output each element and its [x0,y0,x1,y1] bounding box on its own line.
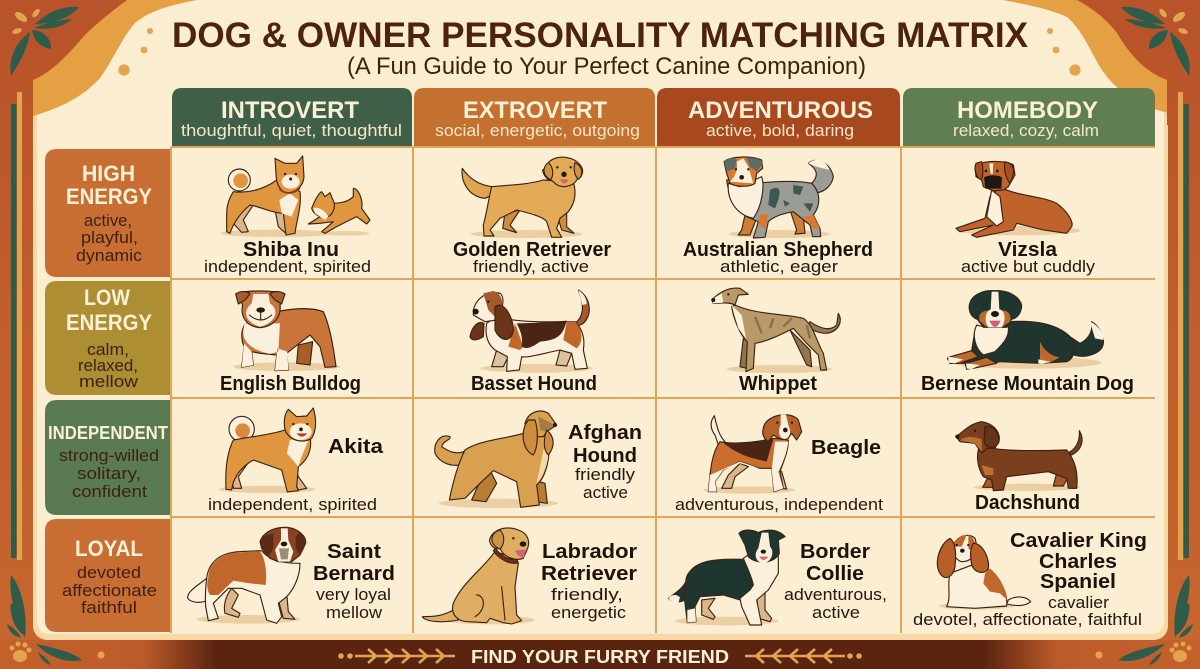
cell: Vizsla: active but cuddly [961,258,1096,276]
leaf ornament top-left [10,7,79,76]
paw bottom-right [1170,642,1192,662]
cell: English Bulldog [220,291,361,395]
footer text: FIND YOUR FURRY FRIEND [471,647,729,667]
left side bars [11,92,22,560]
footer banner [0,640,1200,669]
cell: Akita [208,408,384,514]
paw bottom-left [10,642,32,662]
decorative dots left [118,28,153,76]
cell: Vizsla [956,161,1096,276]
cell: Border Collie [668,530,887,625]
column header: adventurous: ADVENTUROUS [688,97,873,124]
icon: labrador retriever [422,528,535,624]
row label: independent: INDEPENDENT [48,423,168,443]
column header: introvert: thoughtful, quiet, thoughtful [181,121,402,140]
row label: independent: confident [72,482,147,501]
row label: low energy: mellow [79,372,139,391]
icon: basset hound [470,290,593,373]
column header: homebody: HOMEBODY [957,97,1098,124]
cell: Whippet: Whippet [739,373,817,395]
row label: high energy: playful, [81,228,138,247]
cell: Labrador Retriever: Labrador [542,541,637,563]
leaves bottom-left [7,575,82,665]
icon: bernese mountain dog [947,291,1104,369]
cell: Bernese Mountain Dog [921,291,1134,395]
row label: high energy: ENERGY [66,184,152,209]
row label: high energy: dynamic [76,246,143,265]
cell: Shiba Inu: independent, spirited [204,258,371,276]
row label: low energy: relaxed, [78,356,138,375]
title: DOG & OWNER PERSONALITY MATCHING MATRIX [172,16,1029,55]
icon: akita [218,408,316,493]
leaves bottom-right [1118,575,1193,665]
cell: Labrador Retriever: Retriever [541,563,637,585]
cell: Border Collie: adventurous, [784,586,887,604]
cell: Beagle: Beagle [811,437,881,459]
row label: loyal: devoted [77,563,141,582]
column header: homebody [903,88,1155,146]
row label: independent: strong-willed [59,446,159,465]
cell: Afghan Hound: Afghan [568,422,642,444]
left arrows [340,649,455,663]
decorative dots right [1047,28,1081,76]
icon: english bulldog [233,291,340,371]
cell: Akita: independent, spirited [208,496,377,514]
cell: Afghan Hound: friendly [575,466,636,484]
dot bottom-right [1095,651,1103,659]
row label: low energy: ENERGY [66,310,152,335]
right arrows [745,649,860,663]
cell: Cavalier King Charles Spaniel: devotel, affectionate, faithful [913,611,1142,629]
cell: Afghan Hound: Hound [573,445,637,467]
cell: Akita: Akita [328,436,384,458]
icon: golden retriever [462,157,583,238]
column header: extrovert: EXTROVERT [463,97,607,124]
cell: Australian Shepherd: athletic, eager [720,258,839,276]
cell: Dachshund [955,422,1082,514]
cell: English Bulldog: English Bulldog [220,373,361,395]
matrix cell background [171,147,1155,633]
cell: Golden Retriever [453,157,611,276]
cell: Cavalier King Charles Spaniel: Cavalier King [1010,530,1147,552]
cell: Labrador Retriever [422,528,637,624]
row label: independent: solitary, [77,464,141,483]
cell: Labrador Retriever: friendly, [551,586,623,604]
row label: loyal: faithful [81,598,137,617]
cell: Golden Retriever: friendly, active [473,258,589,276]
icon: whippet [711,288,840,373]
cell: Basset Hound [470,290,597,395]
right side bars [1178,92,1189,560]
icon: dachshund [955,422,1082,491]
column header: introvert: INTROVERT [221,97,359,124]
cell: Beagle [675,414,883,514]
cell: Cavalier King Charles Spaniel: Spaniel [1040,571,1116,593]
cell: Vizsla: Vizsla [998,239,1058,261]
dot bottom-left [97,651,105,659]
cell: Cavalier King Charles Spaniel: cavalier [1048,594,1110,612]
cell: Saint Bernard: very loyal [316,586,391,604]
cell: Cavalier King Charles Spaniel [913,530,1147,629]
icon: border collie [668,530,785,625]
subtitle: (A Fun Guide to Your Perfect Canine Companion) [347,53,866,80]
cell: Whippet [711,288,840,395]
cell: Labrador Retriever: energetic [551,604,626,622]
column header: adventurous [657,88,900,146]
row label: high energy [45,149,171,277]
cell: Border Collie: Collie [806,563,864,585]
column header: homebody: relaxed, cozy, calm [953,121,1099,140]
icon: saint bernard [188,527,306,624]
row label: high energy: active, [84,211,132,230]
cell: Shiba Inu [204,156,371,276]
cell: Saint Bernard [188,527,395,624]
cell: Golden Retriever: Golden Retriever [453,239,611,261]
row label: low energy: LOW [84,285,130,310]
cell: Basset Hound: Basset Hound [471,373,597,395]
row label: high energy: HIGH [82,161,135,186]
top-right corner wave [1003,0,1200,125]
cell: Bernese Mountain Dog: Bernese Mountain Dog [921,373,1134,395]
icon: vizsla [956,161,1080,237]
row label: low energy: calm, [87,340,129,359]
cell: Shiba Inu: Shiba Inu [243,239,339,261]
column header: extrovert [414,88,655,146]
cell: Cavalier King Charles Spaniel: Charles [1039,551,1117,573]
icon: beagle [703,414,802,494]
cell: Border Collie: active [812,604,860,622]
icon: shiba dogs [220,156,370,237]
row label: independent [45,400,171,515]
cell: Afghan Hound: active [583,484,628,502]
cell: Australian Shepherd [683,157,873,276]
row label: low energy [45,281,171,395]
column header: introvert [172,88,412,146]
cell: Australian Shepherd: Australian Shepherd [683,239,873,261]
cell: Saint Bernard: Saint [327,541,381,563]
icon: australian shepherd [724,157,833,238]
row label: loyal: LOYAL [75,536,143,561]
cell: Saint Bernard: mellow [326,604,382,622]
cell: Border Collie: Border [800,541,870,563]
row label: loyal [45,519,171,632]
icon: afghan hound [435,411,558,508]
cell: Afghan Hound [435,411,642,508]
row label: loyal: affectionate [62,581,157,600]
column header: adventurous: active, bold, daring [706,121,854,140]
leaf ornament top-right [1121,7,1190,76]
cell: Beagle: adventurous, independent [675,496,883,514]
cell: Dachshund: Dachshund [975,492,1080,514]
cell: Saint Bernard: Bernard [313,563,395,585]
column header: extrovert: social, energetic, outgoing [435,121,640,140]
grid lines [171,147,1155,633]
top-left corner wave [0,0,197,125]
icon: cavalier spaniel [937,535,1031,609]
